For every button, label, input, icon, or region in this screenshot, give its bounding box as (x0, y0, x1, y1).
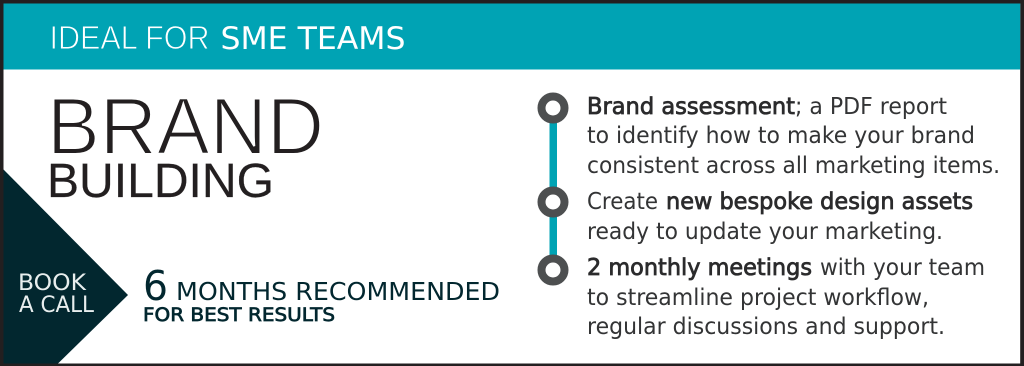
call to action text (18, 271, 95, 318)
recommendation: MONTHS RECOMMENDED (176, 277, 500, 306)
item 2 text: ready to update your marketing. (587, 217, 943, 245)
title: BUILDING (47, 155, 274, 208)
item 2 text (587, 187, 973, 245)
item 1 text: ; a PDF report (795, 92, 947, 120)
recommendation: FOR BEST RESULTS (143, 305, 335, 326)
item 3 text (587, 253, 985, 340)
item 3 text: 2 monthly meetings (587, 253, 812, 281)
item 1 text: consistent across all marketing items. (587, 151, 1000, 179)
item 2 text: Create (587, 187, 658, 215)
item 2 text: new bespoke design assets (666, 187, 973, 215)
recommendation (143, 262, 500, 326)
item 1 text (587, 92, 1000, 179)
call to action arrow (4, 170, 128, 364)
recommendation: 6 (143, 262, 168, 310)
item 3 text: with your team (820, 253, 985, 281)
item 3 text: to streamline project workflow, (587, 283, 929, 311)
header text (50, 19, 406, 57)
call to action text: BOOK (18, 271, 87, 296)
item 1 text: to identify how to make your brand (587, 121, 975, 149)
timeline node 3 (542, 258, 564, 282)
item 3 text: regular discussions and support. (587, 312, 945, 340)
call to action text: A CALL (19, 293, 95, 318)
header text: IDEAL FOR (50, 19, 210, 56)
timeline (542, 96, 564, 282)
header text: SME TEAMS (220, 21, 406, 57)
timeline node 1 (542, 96, 564, 120)
title: BRAND (47, 82, 324, 172)
timeline node 2 (542, 190, 564, 214)
item 1 text: Brand assessment (587, 92, 795, 120)
header band (4, 4, 1020, 70)
